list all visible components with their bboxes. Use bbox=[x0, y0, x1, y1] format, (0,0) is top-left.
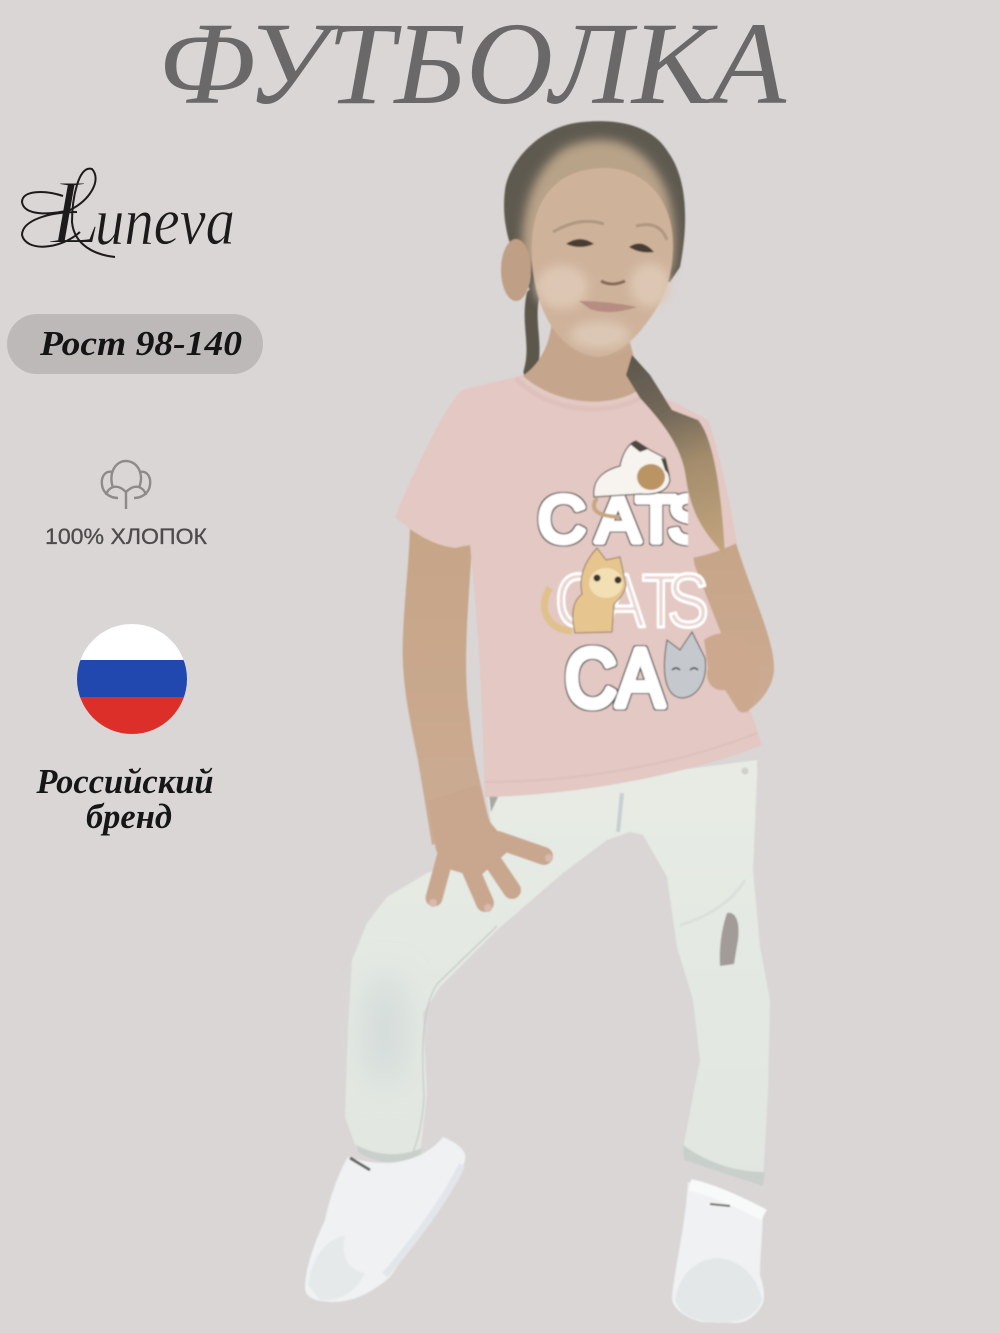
hair bbox=[504, 121, 685, 290]
left arm bbox=[403, 520, 490, 845]
title: ФУТБОЛКА bbox=[158, 0, 787, 129]
left shoe bbox=[305, 1137, 465, 1302]
ear bbox=[501, 239, 531, 301]
jeans tear bbox=[720, 913, 739, 966]
height badge bbox=[7, 314, 263, 374]
jeans bbox=[345, 760, 770, 1186]
logo: Luneva: uneva bbox=[95, 183, 235, 259]
right shoe bbox=[672, 1182, 764, 1323]
print: row 3: CA bbox=[565, 633, 664, 724]
cat: sleeping bbox=[594, 441, 670, 517]
russian brand text: бренд bbox=[86, 798, 172, 836]
mouth bbox=[579, 301, 637, 312]
russian brand text: Российский bbox=[35, 763, 214, 801]
t-shirt print bbox=[538, 441, 712, 724]
face bbox=[532, 168, 673, 357]
right hand bbox=[704, 633, 760, 712]
girl figure bbox=[305, 121, 774, 1323]
t-shirt bbox=[395, 375, 762, 797]
cat: grey bbox=[664, 632, 706, 698]
cat: sitting bbox=[544, 548, 626, 633]
height badge: Рост 98-140 bbox=[39, 324, 242, 363]
print: row 1: CATS bbox=[538, 482, 712, 556]
eyes bbox=[566, 239, 654, 252]
print: row 2: CATS bbox=[555, 558, 709, 643]
head bbox=[501, 121, 685, 357]
right braid bbox=[626, 355, 725, 556]
icon: cotton bbox=[102, 461, 150, 509]
left hand bbox=[428, 785, 553, 912]
logo: Luneva: L bbox=[48, 161, 101, 263]
icon: russian flag bbox=[77, 624, 187, 734]
logo: Luneva bbox=[22, 161, 235, 263]
cotton badge bbox=[45, 461, 207, 549]
right arm bbox=[692, 540, 774, 712]
cotton badge: 100% ХЛОПОК bbox=[45, 524, 207, 549]
jeans fly bbox=[618, 793, 622, 832]
nose bbox=[601, 281, 625, 284]
neck bbox=[520, 320, 645, 420]
left braid bbox=[530, 295, 533, 372]
